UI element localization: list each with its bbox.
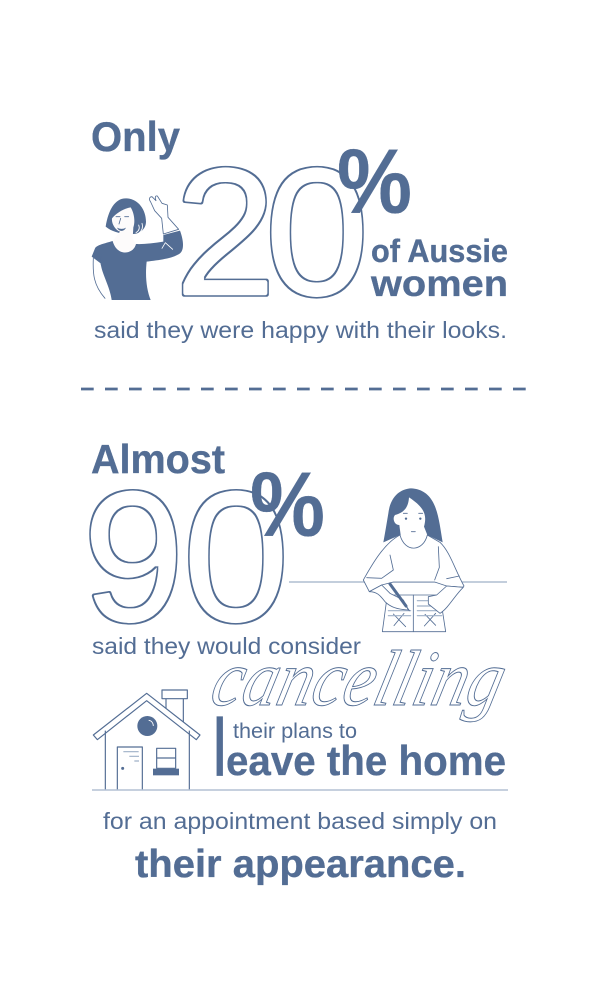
face — [394, 497, 427, 547]
face and neck — [112, 207, 136, 252]
left hand — [369, 585, 408, 610]
big number: 90: 9 — [83, 453, 184, 660]
text: would consider: said they would consider — [92, 633, 361, 659]
label: of Aussie women: women — [370, 263, 508, 304]
tall letter l: l — [214, 703, 226, 795]
eyes and mouth — [403, 513, 423, 532]
percent sign: 90%: % — [250, 453, 325, 556]
walls — [105, 731, 189, 790]
big number: 20: 2 — [175, 132, 276, 334]
illustration: woman making peace sign — [92, 196, 183, 300]
script word: cancelling: cancelling — [204, 634, 516, 722]
pen — [390, 584, 406, 606]
heading: Almost: Almost — [91, 436, 225, 482]
round window — [137, 716, 157, 736]
door — [117, 747, 142, 790]
hair — [106, 198, 146, 234]
text: appointment: for an appointment based simply on — [103, 808, 497, 834]
sweater outline — [363, 535, 464, 592]
text: eave the home: eave the home — [226, 737, 506, 784]
chimney — [162, 690, 187, 725]
big number: 20: 0 — [265, 131, 369, 333]
face features — [116, 217, 129, 224]
right hand — [428, 586, 463, 613]
open planner — [382, 595, 446, 632]
roof — [93, 693, 200, 740]
big number: 20 — [175, 131, 369, 334]
raised hand and forearm — [150, 196, 179, 234]
text: their plans to: their plans to — [233, 720, 357, 743]
percent sign: 20%: % — [337, 130, 412, 233]
heading: Only: Only — [91, 113, 181, 160]
big number: 90 — [83, 453, 289, 660]
square window — [157, 748, 176, 768]
long hair — [383, 488, 443, 542]
shirt — [92, 231, 183, 300]
big number: 90: 0 — [183, 453, 289, 660]
bare arm — [93, 253, 105, 298]
text: happy with their looks: said they were happy with their looks. — [94, 317, 507, 343]
closing statement: their appearance. — [135, 843, 466, 886]
label: of Aussie women — [370, 233, 508, 304]
label: of Aussie women: of Aussie — [371, 233, 508, 269]
illustration: house — [93, 690, 200, 790]
illustration: woman writing in planner — [363, 488, 464, 632]
